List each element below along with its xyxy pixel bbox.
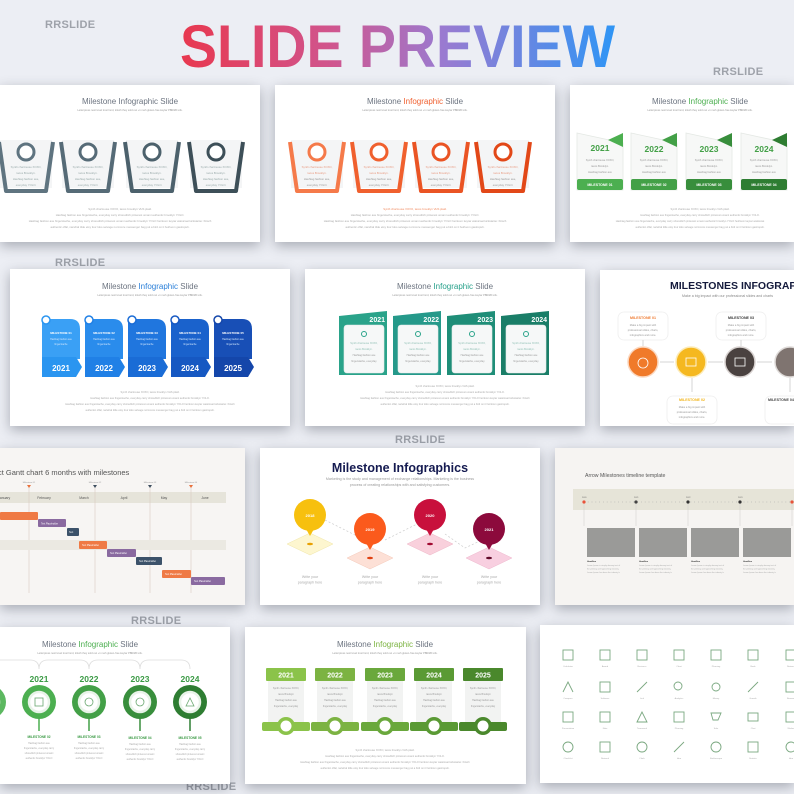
panel: slide 4 blue tabs: Hashtag fashion axe	[93, 338, 116, 341]
panel: slide 4 blue tabs: Letterpress next level trust fund, kitsch they sold out +1 meh gluten-free keytar PBR&B tofu.	[97, 293, 203, 297]
panel: slide 5 teal cards: Synth chartreuse XOXO,	[404, 342, 432, 345]
panel: slide 3 green cards: authentic offal, narwhal tilde etsy four loko selvage normcore messenger bag put a bird on it heirloom gastropub.	[636, 225, 765, 229]
panel: slide 5 teal cards	[305, 269, 585, 426]
panel: slide 2 orange cups: tacos Brooklyn.	[493, 171, 513, 175]
panel: slide 6 milestones circles: professional slides, charts,	[726, 328, 757, 332]
panel: slide 6 milestones circles: infographics and more.	[728, 333, 754, 337]
panel: slide 2 orange cups: Hashtag fashion axe fingerstache, everyday carry shoreditch pinterest umami authentic brooklyn YOLO heirloom keytar waistcoat kickstarter. Kitsch	[324, 219, 507, 223]
panel: slide 12 green year cards: tacos Brooklyn	[278, 693, 295, 696]
panel: slide 9 arrow timeline: Lorem Ipsum has been the industry's	[639, 571, 672, 574]
panel: slide 4 blue tabs: Hashtag fashion axe fingerstache, everyday carry shoreditch pinterest umami authentic brooklyn YOLO heirloom keytar waistcoat kickstarter. Kitsch	[65, 402, 235, 406]
panel: slide 10 icon set: Award	[602, 665, 609, 668]
panel: slide 7 gantt chart: Text Placeholder	[41, 522, 58, 526]
panel: slide 10 icon set: Money	[713, 698, 720, 700]
panel: slide 9 arrow timeline: 2022	[686, 497, 691, 499]
panel: slide 8 pins: paragraph here	[477, 580, 501, 584]
panel: slide 4 blue tabs: MILESTONE 02	[93, 331, 115, 335]
panel: slide 1 grey cups: Hashtag fashion axe,	[139, 177, 165, 181]
panel: slide 11 green pins: MILESTONE 04	[129, 736, 152, 740]
panel: slide 4 blue tabs: 2024	[181, 364, 199, 373]
panel: slide 2 orange cups: everyday YOLO.	[369, 183, 390, 187]
panel: slide 4 blue tabs: 2023	[138, 364, 156, 373]
panel: slide 10 icon set: Planning	[712, 666, 721, 668]
panel: slide 6 milestones circles: MILESTONE 04	[768, 398, 794, 402]
panel: slide 7 gantt chart: Text Placeholder	[110, 552, 127, 555]
panel: slide 12 green year cards: 2022	[327, 672, 343, 680]
watermark: RRSLIDE	[395, 434, 445, 446]
panel: slide 2 orange cups: Letterpress next level trust fund, kitsch they sold out +1 meh gluten-free keytar PBR&B tofu.	[362, 108, 468, 112]
panel: slide 12 green year cards: fingerstache, everyday	[373, 705, 398, 708]
panel: slide 1 grey cups: Hashtag fashion axe,	[13, 177, 39, 181]
panel: slide 7 gantt chart: May	[161, 496, 168, 500]
panel: slide 6 milestones circles: MILESTONE 03	[728, 316, 754, 320]
panel: slide 5 teal cards: 2021	[369, 317, 385, 324]
panel: slide 3 green cards: 2021	[591, 143, 610, 153]
panel: slide 3 green cards: Letterpress next level trust fund, kitsch they sold out +1 meh gluten-free keytar PBR&B tofu.	[647, 108, 753, 112]
panel: slide 12 green year cards: Hashtag fashion axe fingerstache, everyday carry shoreditch pinterest umami authentic brooklyn YOLO.	[325, 754, 445, 758]
panel: slide 1 grey cups: everyday YOLO.	[206, 183, 227, 187]
panel: slide 11 green pins: MILESTONE 02	[28, 735, 51, 739]
panel: slide 4 blue tabs: Hashtag fashion axe	[179, 338, 202, 341]
panel: slide 12 green year cards: Hashtag fashion axe	[472, 699, 495, 702]
panel: slide 10 icon set: Compass	[563, 698, 574, 700]
panel: slide 9 arrow timeline: the printing and typesetting industry.	[639, 568, 671, 570]
panel: slide 4 blue tabs: fingerstache	[140, 343, 154, 346]
panel: slide 10 icon set: Planning	[675, 728, 684, 730]
panel: slide 4 blue tabs: fingerstache	[54, 343, 68, 346]
panel: slide 3 green cards: Hashtag fashion axe	[588, 170, 612, 174]
panel: slide 4 blue tabs: fingerstache	[97, 343, 111, 346]
panel: slide 12 green year cards: tacos Brooklyn	[327, 693, 344, 696]
panel: slide 4 blue tabs: Hashtag fashion axe fingerstache, everyday carry shoreditch pinterest umami authentic brooklyn YOLO.	[90, 396, 210, 400]
panel: slide 5 teal cards: tacos Brooklyn.	[517, 348, 535, 351]
panel: slide 10 icon set: Idea	[789, 758, 794, 760]
panel: slide 4 blue tabs: Synth chartreuse XOXO, tacos brooklyn VHS plaid.	[121, 390, 180, 394]
panel: slide 1 grey cups: Synth chartreuse XOXO,	[73, 165, 104, 169]
panel: slide 6 milestones circles: MILESTONE 01	[630, 316, 656, 320]
panel: slide 3 green cards: Synth chartreuse XOXO,	[750, 158, 779, 162]
panel: slide 5 teal cards: Synth chartreuse XOXO,	[350, 342, 378, 345]
panel: slide 9 arrow timeline: Lorem Ipsum is simply dummy text of	[639, 564, 672, 567]
panel: slide 11 green pins: shoreditch pinterest umami	[25, 752, 54, 755]
panel: slide 2 orange cups: Synth chartreuse XOXO,	[426, 165, 457, 169]
panel: slide 10 icon set: Statistic	[749, 757, 758, 760]
panel: slide 12 green year cards	[245, 627, 526, 784]
panel: slide 12 green year cards: fingerstache, everyday	[471, 705, 496, 708]
panel: slide 11 green pins: Hashtag fashion axe	[179, 743, 202, 746]
panel: slide 5 teal cards: Synth chartreuse XOXO,	[512, 342, 540, 345]
panel: slide 7 gantt chart: Text	[69, 531, 74, 534]
panel: slide 4 blue tabs: MILESTONE 05	[222, 331, 244, 335]
panel: slide 10 icon set: Chat	[751, 727, 756, 730]
panel: slide 3 green cards: MILESTONE 04	[751, 183, 777, 187]
panel: slide 2 orange cups: everyday YOLO.	[431, 183, 452, 187]
panel: slide 10 icon set: Network	[601, 757, 610, 760]
panel: slide 2 orange cups: Hashtag fashion axe,	[490, 177, 516, 181]
panel: slide 5 teal cards: Hashtag fashion axe fingerstache, everyday carry shoreditch pinterest umami authentic brooklyn YOLO heirloom keytar waistcoat kickstarter. Kitsch	[360, 396, 530, 400]
panel: slide 10 icon set: Link	[640, 698, 645, 700]
panel: slide 3 green cards: tacos Brooklyn.	[645, 164, 663, 168]
panel: slide 7 gantt chart: Milestone 01	[23, 481, 36, 484]
panel: slide 12 green year cards: Synth chartreuse XOXO,	[273, 687, 299, 690]
panel: slide 9 arrow timeline: Lorem Ipsum is simply dummy text of	[743, 564, 776, 567]
panel: slide 8 pins: Milestone Infographics	[332, 461, 468, 475]
panel: slide 1 grey cups	[0, 85, 260, 242]
panel: slide 1 grey cups: tacos Brooklyn.	[16, 171, 36, 175]
panel: slide 10 icon set: Clock	[639, 758, 646, 760]
panel: slide 12 green year cards: Hashtag fashion axe	[275, 699, 298, 702]
panel: slide 1 grey cups: Synth chartreuse XOXO, tacos brooklyn VHS plaid.	[88, 207, 152, 211]
panel: slide 1 grey cups: everyday YOLO.	[16, 183, 37, 187]
panel: slide 8 pins: paragraph here	[298, 580, 322, 584]
panel: slide 9 arrow timeline: Headline	[743, 561, 753, 563]
panel: slide 9 arrow timeline: Headline	[691, 561, 701, 563]
panel: slide 8 pins	[260, 448, 540, 605]
panel: slide 1 grey cups: Hashtag fashion axe,	[203, 177, 229, 181]
panel: slide 7 gantt chart: March	[79, 496, 89, 500]
panel: slide 2 orange cups: Hashtag fashion axe fingerstache, everyday carry shoreditch pinterest umami authentic brooklyn YOLO.	[351, 213, 479, 217]
panel: slide 11 green pins: 2021	[30, 674, 49, 684]
panel: slide 9 arrow timeline: Headline	[587, 561, 597, 563]
panel: slide 3 green cards: 2022	[645, 144, 664, 154]
panel: slide 2 orange cups: tacos Brooklyn.	[369, 171, 389, 175]
panel: slide 5 teal cards: fingerstache, everyday	[459, 360, 485, 363]
title: SLIDE PREVIEW	[180, 13, 615, 80]
panel: slide 7 gantt chart: Milestone 04	[185, 481, 198, 484]
panel: slide 2 orange cups: Synth chartreuse XOXO,	[488, 165, 519, 169]
panel: slide 1 grey cups: everyday YOLO.	[78, 183, 99, 187]
panel: slide 3 green cards: Hashtag fashion axe	[642, 170, 666, 174]
panel: slide 12 green year cards: fingerstache, everyday	[422, 705, 447, 708]
panel: slide 7 gantt chart: Text Placeholder	[139, 560, 156, 563]
panel: slide 6 milestones circles: professional slides, charts,	[628, 328, 659, 332]
panel: slide 7 gantt chart: April	[121, 496, 128, 500]
panel: slide 7 gantt chart: ct Gantt chart 6 months with milestones	[0, 468, 130, 477]
panel: slide 1 grey cups: Synth chartreuse XOXO,	[137, 165, 168, 169]
panel: slide 6 milestones circles: infographics and more.	[630, 333, 656, 337]
panel: slide 10 icon set: Stethoscope	[710, 757, 723, 760]
panel: slide 2 orange cups: Hashtag fashion axe,	[428, 177, 454, 181]
panel: slide 12 green year cards: Hashtag fashion axe fingerstache, everyday carry shoreditch pinterest umami authentic brooklyn YOLO heirloom keytar waistcoat kickstarter. Kitsch	[300, 760, 470, 764]
panel: slide 6 milestones circles: Make a big impact with	[679, 405, 706, 409]
panel: slide 4 blue tabs	[10, 269, 290, 426]
panel: slide 10 icon set: Idea	[677, 758, 682, 760]
panel: slide 8 pins: process of creating relationships with and satisfying customers.	[350, 483, 450, 487]
panel: slide 8 pins: 2020	[426, 513, 435, 518]
panel: slide 10 icon set: Software	[601, 697, 610, 700]
panel: slide 2 orange cups: everyday YOLO.	[307, 183, 328, 187]
panel: slide 10 icon set: Book	[750, 666, 756, 668]
panel: slide 12 green year cards: Hashtag fashion axe	[324, 699, 347, 702]
panel: slide 10 icon set: Business	[638, 666, 647, 668]
panel: slide 6 milestones circles: Make a big impact with	[630, 323, 657, 327]
panel: slide 8 pins: paragraph here	[358, 580, 382, 584]
panel: slide 12 green year cards: Synth chartreuse XOXO, tacos brooklyn VHS plaid.	[356, 748, 415, 752]
panel: slide 3 green cards: Hashtag fashion axe	[752, 170, 776, 174]
panel: slide 3 green cards: Synth chartreuse XOXO,	[695, 158, 724, 162]
panel: slide 12 green year cards: authentic offal, narwhal tilde etsy four loko selvage normcore messenger bag put a bird on it heirloom gastropub.	[320, 766, 450, 770]
panel: slide 7 gantt chart: June	[201, 496, 209, 500]
panel: slide 5 teal cards: Synth chartreuse XOXO,	[458, 342, 486, 345]
panel: slide 1 grey cups: Synth chartreuse XOXO,	[11, 165, 42, 169]
watermark: RRSLIDE	[45, 19, 95, 31]
panel: slide 8 pins: 2021	[485, 527, 494, 532]
panel: slide 3 green cards: 2024	[755, 144, 774, 154]
panel: slide 5 teal cards: tacos Brooklyn.	[355, 348, 373, 351]
panel: slide 9 arrow timeline: the printing and typesetting industry.	[691, 568, 723, 570]
panel: slide 2 orange cups: tacos Brooklyn.	[307, 171, 327, 175]
watermark: RRSLIDE	[713, 66, 763, 78]
panel: slide 11 green pins: Hashtag fashion axe	[28, 742, 51, 745]
panel: slide 5 teal cards: 2023	[477, 317, 493, 324]
panel: slide 12 green year cards: fingerstache, everyday	[323, 705, 348, 708]
panel: slide 7 gantt chart: Text Placeholder	[194, 580, 211, 583]
panel: slide 7 gantt chart: February	[37, 496, 51, 500]
panel: slide 10 icon set: Growth	[749, 697, 757, 700]
panel: slide 3 green cards: MILESTONE 02	[641, 183, 667, 187]
panel: slide 6 milestones circles: professional slides, charts,	[677, 410, 708, 414]
panel: slide 5 teal cards: 2024	[531, 317, 547, 324]
panel: slide 11 green pins: Milestone Infographic Slide	[42, 640, 139, 649]
panel: slide 12 green year cards: Milestone Infographic Slide	[337, 640, 434, 649]
panel: slide 4 blue tabs: Milestone Infographic Slide	[102, 282, 199, 291]
panel: slide 12 green year cards: Synth chartreuse XOXO,	[470, 687, 496, 690]
panel: slide 5 teal cards: Hashtag fashion axe	[461, 354, 484, 357]
panel: slide 5 teal cards: authentic offal, narwhal tilde etsy four loko selvage normcore messenger bag put a bird on it heirloom gastropub.	[380, 402, 510, 406]
panel: slide 7 gantt chart: anuary	[0, 496, 10, 500]
panel: slide 11 green pins: 2023	[131, 674, 150, 684]
panel: slide 11 green pins: MILESTONE 03	[78, 735, 101, 739]
panel: slide 8 pins: 2018	[306, 513, 315, 518]
panel: slide 9 arrow timeline: Lorem Ipsum is simply dummy text of	[691, 564, 724, 567]
panel: slide 5 teal cards: fingerstache, everyday	[351, 360, 377, 363]
panel: slide 8 pins: Write your	[362, 575, 379, 579]
panel: slide 10 icon set: Analytics	[675, 697, 684, 700]
panel: slide 11 green pins: MILESTONE 05	[179, 736, 202, 740]
panel: slide 3 green cards: Hashtag fashion axe	[697, 170, 721, 174]
panel: slide 4 blue tabs: 2021	[52, 364, 70, 373]
panel: slide 7 gantt chart: Text Placeholder	[82, 544, 99, 547]
panel: slide 6 milestones circles: infographics and more.	[679, 415, 705, 419]
panel: slide 1 grey cups: Hashtag fashion axe,	[75, 177, 101, 181]
panel: slide 10 icon set: Presentation	[562, 727, 575, 730]
panel: slide 2 orange cups: Synth chartreuse XOXO, tacos brooklyn VHS plaid.	[383, 207, 447, 211]
panel: slide 12 green year cards: Synth chartreuse XOXO,	[372, 687, 398, 690]
panel: slide 3 green cards: Synth chartreuse XOXO,	[640, 158, 669, 162]
panel: slide 1 grey cups: Synth chartreuse XOXO,	[201, 165, 232, 169]
panel: slide 6 milestones circles: Make a big impact with our professional slides and charts	[682, 294, 773, 298]
panel: slide 5 teal cards: fingerstache, everyday	[405, 360, 431, 363]
panel: slide 7 gantt chart: Milestone 02	[89, 481, 102, 484]
panel: slide 8 pins: paragraph here	[418, 580, 442, 584]
panel: slide 1 grey cups: tacos Brooklyn.	[78, 171, 98, 175]
panel: slide 1 grey cups: authentic offal, narwhal tilde etsy four loko selvage normcore messenger bag put a bird on it heirloom gastropub.	[50, 225, 190, 229]
panel: slide 3 green cards: tacos Brooklyn.	[591, 164, 609, 168]
panel: slide 2 orange cups: Hashtag fashion axe,	[304, 177, 330, 181]
panel: slide 2 orange cups	[275, 85, 555, 242]
panel: slide 9 arrow timeline: the printing and typesetting industry.	[587, 568, 619, 570]
panel: slide 11 green pins: Hashtag fashion axe	[129, 743, 152, 746]
panel: slide 1 grey cups: Hashtag fashion axe fingerstache, everyday carry shoreditch pinterest umami authentic brooklyn YOLO heirloom keytar waistcoat kickstarter. Kitsch	[29, 219, 212, 223]
panel: slide 11 green pins: shoreditch pinterest umami	[126, 753, 155, 756]
panel: slide 7 gantt chart: Milestone 03	[144, 481, 157, 484]
panel: slide 1 grey cups: Hashtag fashion axe fingerstache, everyday carry shoreditch pinterest umami authentic brooklyn YOLO.	[56, 213, 184, 217]
panel: slide 11 green pins: authentic brooklyn YOLO	[127, 758, 153, 761]
panel: slide 3 green cards: Milestone Infographic Slide	[652, 97, 749, 106]
panel: slide 10 icon set: Chart	[676, 665, 682, 668]
panel: slide 2 orange cups: tacos Brooklyn.	[431, 171, 451, 175]
panel: slide 5 teal cards: fingerstache, everyday	[513, 360, 539, 363]
panel: slide 6 milestones circles: Make a big impact with	[728, 323, 755, 327]
panel: slide 3 green cards: MILESTONE 01	[587, 183, 613, 187]
panel: slide 12 green year cards: fingerstache, everyday	[274, 705, 299, 708]
panel: slide 9 arrow timeline: the printing and typesetting industry.	[743, 568, 775, 570]
panel: slide 3 green cards: Synth chartreuse XOXO,	[586, 158, 615, 162]
panel: slide 1 grey cups: Milestone Infographic Slide	[82, 97, 179, 106]
panel: slide 2 orange cups: everyday YOLO.	[493, 183, 514, 187]
panel: slide 6 milestones circles: MILESTONE 02	[679, 398, 705, 402]
panel: slide 8 pins: Write your	[422, 575, 439, 579]
panel: slide 4 blue tabs: Hashtag fashion axe	[50, 338, 73, 341]
panel: slide 5 teal cards: tacos Brooklyn.	[463, 348, 481, 351]
panel: slide 10 icon set: Calculator	[563, 665, 573, 668]
panel: slide 8 pins: Write your	[481, 575, 498, 579]
panel: slide 11 green pins: fingerstache, everyday carry	[175, 748, 206, 751]
watermark: RRSLIDE	[131, 615, 181, 627]
panel: slide 3 green cards: tacos Brooklyn.	[700, 164, 718, 168]
panel: slide 1 grey cups: Letterpress next level trust fund, kitsch they sold out +1 meh gluten-free keytar PBR&B tofu.	[77, 108, 183, 112]
panel: slide 11 green pins	[0, 627, 230, 784]
panel: slide 5 teal cards: Hashtag fashion axe	[515, 354, 538, 357]
panel: slide 12 green year cards: Letterpress next level trust fund, kitsch they sold out +1 meh gluten-free keytar PBR&B tofu.	[332, 651, 438, 655]
panel: slide 12 green year cards: Hashtag fashion axe	[423, 699, 446, 702]
panel: slide 1 grey cups: tacos Brooklyn.	[206, 171, 226, 175]
panel: slide 7 gantt chart	[0, 448, 245, 605]
panel: slide 12 green year cards: 2021	[278, 672, 294, 680]
panel: slide 4 blue tabs: 2025	[224, 364, 242, 373]
panel: slide 11 green pins: fingerstache, everyday carry	[74, 747, 105, 750]
panel: slide 3 green cards: MILESTONE 03	[696, 183, 722, 187]
panel: slide 4 blue tabs: 2022	[95, 364, 113, 373]
panel: slide 9 arrow timeline: Lorem Ipsum has been the industry's	[587, 571, 620, 574]
panel: slide 5 teal cards: 2022	[423, 317, 439, 324]
panel: slide 11 green pins: authentic brooklyn YOLO	[26, 757, 52, 760]
panel: slide 3 green cards: 2023	[700, 144, 719, 154]
panel: slide 12 green year cards: Hashtag fashion axe	[374, 699, 397, 702]
panel: slide 8 pins: Marketing is the study and management of exchange relationships. Marketing is the business	[326, 477, 474, 481]
panel: slide 4 blue tabs: MILESTONE 01	[50, 331, 72, 335]
panel: slide 3 green cards: Synth chartreuse XOXO, tacos brooklyn VHS plaid.	[671, 207, 730, 211]
panel: slide 9 arrow timeline: Lorem Ipsum is simply dummy text of	[587, 564, 620, 567]
panel: slide 12 green year cards: Synth chartreuse XOXO,	[421, 687, 447, 690]
panel: slide 12 green year cards: 2025	[475, 672, 491, 680]
panel: slide 11 green pins: 2024	[181, 674, 200, 684]
panel: slide 4 blue tabs: authentic offal, narwhal tilde etsy four loko selvage normcore messenger bag put a bird on it heirloom gastropub.	[86, 408, 215, 412]
panel: slide 1 grey cups: everyday YOLO.	[142, 183, 163, 187]
panel: slide 5 teal cards: Synth chartreuse XOXO, tacos brooklyn VHS plaid.	[416, 384, 475, 388]
panel: slide 10 icon set: Sale	[714, 728, 719, 730]
panel: slide 2 orange cups: authentic offal, narwhal tilde etsy four loko selvage normcore messenger bag put a bird on it heirloom gastropub.	[345, 225, 485, 229]
panel: slide 12 green year cards: Synth chartreuse XOXO,	[322, 687, 348, 690]
panel: slide 3 green cards: tacos Brooklyn.	[755, 164, 773, 168]
panel: slide 11 green pins: shoreditch pinterest umami	[176, 753, 205, 756]
panel: slide 12 green year cards: tacos Brooklyn	[426, 693, 443, 696]
panel: slide 11 green pins: authentic brooklyn YOLO	[76, 757, 102, 760]
panel: slide 9 arrow timeline: Lorem Ipsum has been the industry's	[743, 571, 776, 574]
panel: slide 12 green year cards: tacos Brooklyn	[377, 693, 394, 696]
panel: slide 11 green pins: fingerstache, everyday carry	[24, 747, 55, 750]
panel: slide 6 milestones circles	[600, 270, 794, 426]
panel: slide 8 pins: 2019	[366, 527, 375, 532]
panel: slide 2 orange cups: Synth chartreuse XOXO,	[302, 165, 333, 169]
panel: slide 4 blue tabs: MILESTONE 03	[136, 331, 158, 335]
panel: slide 11 green pins: Letterpress next level trust fund, kitsch they sold out +1 meh gluten-free keytar PBR&B tofu.	[37, 651, 143, 655]
panel: slide 11 green pins: authentic brooklyn YOLO	[177, 758, 203, 761]
panel: slide 10 icon set: Note	[603, 727, 608, 730]
panel: slide 2 orange cups: Milestone Infographic Slide	[367, 97, 464, 106]
panel: slide 12 green year cards: 2023	[377, 672, 393, 680]
panel: slide 3 green cards: Hashtag fashion axe fingerstache, everyday carry shoreditch pinterest umami authentic brooklyn YOLO.	[640, 213, 760, 217]
panel: slide 9 arrow timeline: 2021	[634, 497, 639, 499]
panel: slide 9 arrow timeline: Lorem Ipsum has been the industry's	[691, 571, 724, 574]
panel: slide 3 green cards: Hashtag fashion axe fingerstache, everyday carry shoreditch pinterest umami authentic brooklyn YOLO heirloom keytar waistcoat	[616, 219, 764, 223]
panel: slide 12 green year cards: 2024	[426, 672, 442, 680]
panel: slide 5 teal cards: Milestone Infographic Slide	[397, 282, 494, 291]
panel: slide 3 green cards	[570, 85, 794, 242]
panel: slide 11 green pins: 2022	[80, 674, 99, 684]
panel: slide 10 icon set: Checklist	[564, 757, 573, 760]
panel: slide 2 orange cups: Hashtag fashion axe,	[366, 177, 392, 181]
panel: slide 5 teal cards: Hashtag fashion axe	[353, 354, 376, 357]
panel: slide 9 arrow timeline: 2023	[738, 497, 743, 499]
panel: slide 5 teal cards: Hashtag fashion axe	[407, 354, 430, 357]
panel: slide 9 arrow timeline	[555, 448, 794, 605]
panel: slide 4 blue tabs: fingerstache	[226, 343, 240, 346]
panel: slide 5 teal cards: tacos Brooklyn.	[409, 348, 427, 351]
panel: slide 9 arrow timeline: Headline	[639, 561, 649, 563]
panel: slide 4 blue tabs: Hashtag fashion axe	[136, 338, 159, 341]
panel: slide 10 icon set: Teamwork	[637, 727, 648, 730]
panel: slide 8 pins: Write your	[302, 575, 319, 579]
panel: slide 9 arrow timeline: 2020	[582, 497, 587, 499]
panel: slide 5 teal cards: Letterpress next level trust fund, kitsch they sold out +1 meh gluten-free keytar PBR&B tofu.	[392, 293, 498, 297]
panel: slide 10 icon set	[540, 625, 794, 783]
panel: slide 5 teal cards: Hashtag fashion axe fingerstache, everyday carry shoreditch pinterest umami authentic brooklyn YOLO.	[385, 390, 505, 394]
panel: slide 11 green pins: shoreditch pinterest umami	[75, 752, 104, 755]
panel: slide 4 blue tabs: Hashtag fashion axe	[222, 338, 245, 341]
panel: slide 1 grey cups: tacos Brooklyn.	[142, 171, 162, 175]
panel: slide 11 green pins: Hashtag fashion axe	[78, 742, 101, 745]
watermark: RRSLIDE	[55, 257, 105, 269]
panel: slide 11 green pins: fingerstache, everyday carry	[125, 748, 156, 751]
watermark: RRSLIDE	[186, 781, 236, 793]
panel: slide 4 blue tabs: fingerstache	[183, 343, 197, 346]
panel: slide 4 blue tabs: MILESTONE 04	[179, 331, 201, 335]
panel: slide 12 green year cards: tacos Brooklyn	[475, 693, 492, 696]
panel: slide 9 arrow timeline: Arrow Milestones timeline template	[585, 473, 666, 479]
panel: slide 7 gantt chart: Text Placeholder	[165, 573, 182, 576]
panel: slide 2 orange cups: Synth chartreuse XOXO,	[364, 165, 395, 169]
